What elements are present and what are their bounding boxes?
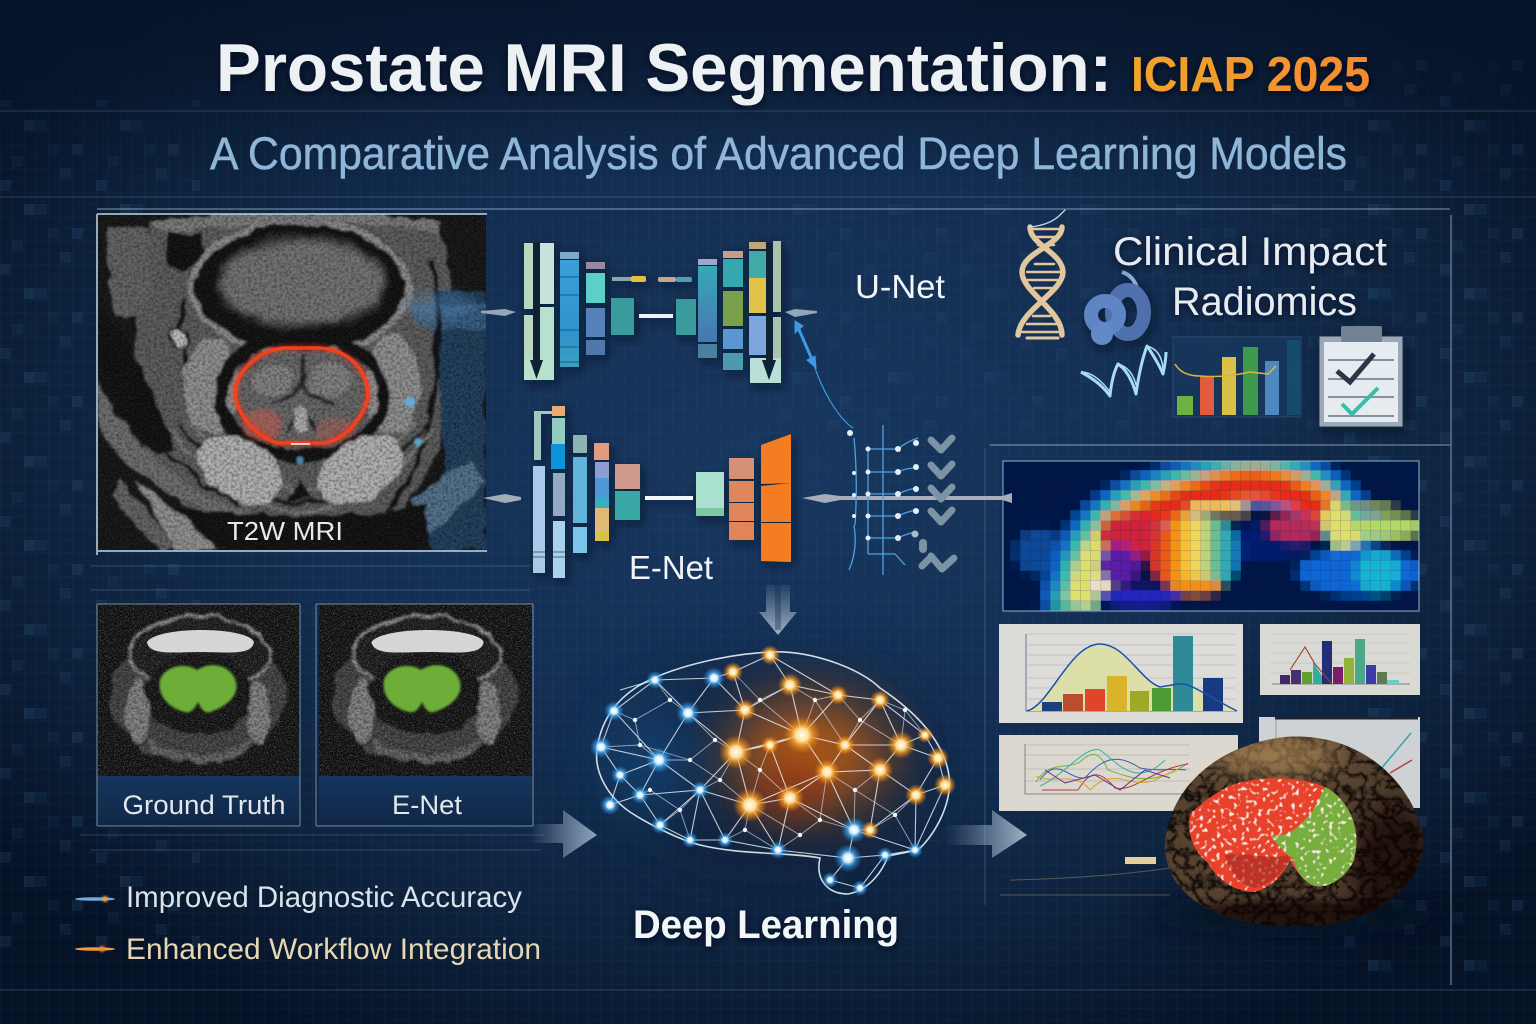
label: U-Net: U-Net: [855, 268, 945, 305]
feature selection tree with checks: [847, 425, 954, 575]
subtitle: A Comparative Analysis of Advanced Deep Learning Models: [210, 128, 1347, 179]
heading: Clinical Impact Radiomics: [1113, 230, 1387, 324]
radiomics knot icon: [1091, 272, 1144, 345]
lower bulbs: [196, 433, 284, 507]
heading: Clinical Impact Radiomics: Clinical Impact: [1113, 230, 1387, 274]
bladder: [190, 218, 410, 358]
decoder: [676, 299, 696, 335]
heading: Clinical Impact Radiomics: Radiomics: [1172, 280, 1357, 324]
title: Prostate MRI Segmentation:: [216, 30, 1112, 106]
arrow: segmentation to brain: [530, 810, 597, 858]
label: E-Net: E-Net: [629, 549, 713, 586]
clipboard checklist icon: [1319, 326, 1403, 427]
panel: ground truth: [97, 604, 300, 826]
waveform icon: [1081, 346, 1166, 396]
arrows beside E-Net: [483, 493, 1012, 503]
line chart: [999, 735, 1238, 811]
E-Net architecture diagram: [533, 406, 791, 578]
down arrow to brain: [759, 585, 797, 635]
prostate contour: [235, 348, 368, 443]
heatmap: [1002, 460, 1420, 612]
panel: E-Net result: E-Net: [392, 790, 462, 820]
mini bar chart: [1173, 337, 1301, 417]
outer tissue: [135, 218, 455, 520]
red tumour glow: [242, 409, 282, 441]
panel: E-Net result: [316, 604, 533, 826]
prostate 3D model with segmentation: [1000, 730, 1445, 940]
arrow: brain to charts: [945, 810, 1027, 858]
right blue ghost: [427, 289, 486, 550]
panel: T2W MRI scan: [97, 211, 487, 555]
bar and curve chart: [999, 624, 1243, 723]
blue curved connector arrow: [795, 321, 853, 428]
side tissue: [184, 337, 240, 433]
U-Net architecture diagram: [524, 241, 781, 383]
title: ICIAP 2025: [1131, 48, 1370, 102]
trend line chart behind organ: [1259, 717, 1420, 808]
prostate: [236, 348, 368, 442]
panel: ground truth: Ground Truth: [122, 790, 286, 820]
DNA icon: [1018, 210, 1065, 338]
deep learning brain network: [590, 645, 956, 896]
bullet: enhanced workflow integration: Enhanced Workflow Integration: [126, 933, 541, 966]
small bar chart: [1260, 624, 1420, 695]
encoder: [524, 243, 533, 309]
bullet: improved diagnostic accuracy: Improved Diagnostic Accuracy: [126, 881, 522, 914]
label: T2W MRI: T2W MRI: [227, 516, 343, 546]
arrows beside U-Net: [481, 309, 817, 317]
label: Deep Learning: Deep Learning: [633, 903, 899, 947]
